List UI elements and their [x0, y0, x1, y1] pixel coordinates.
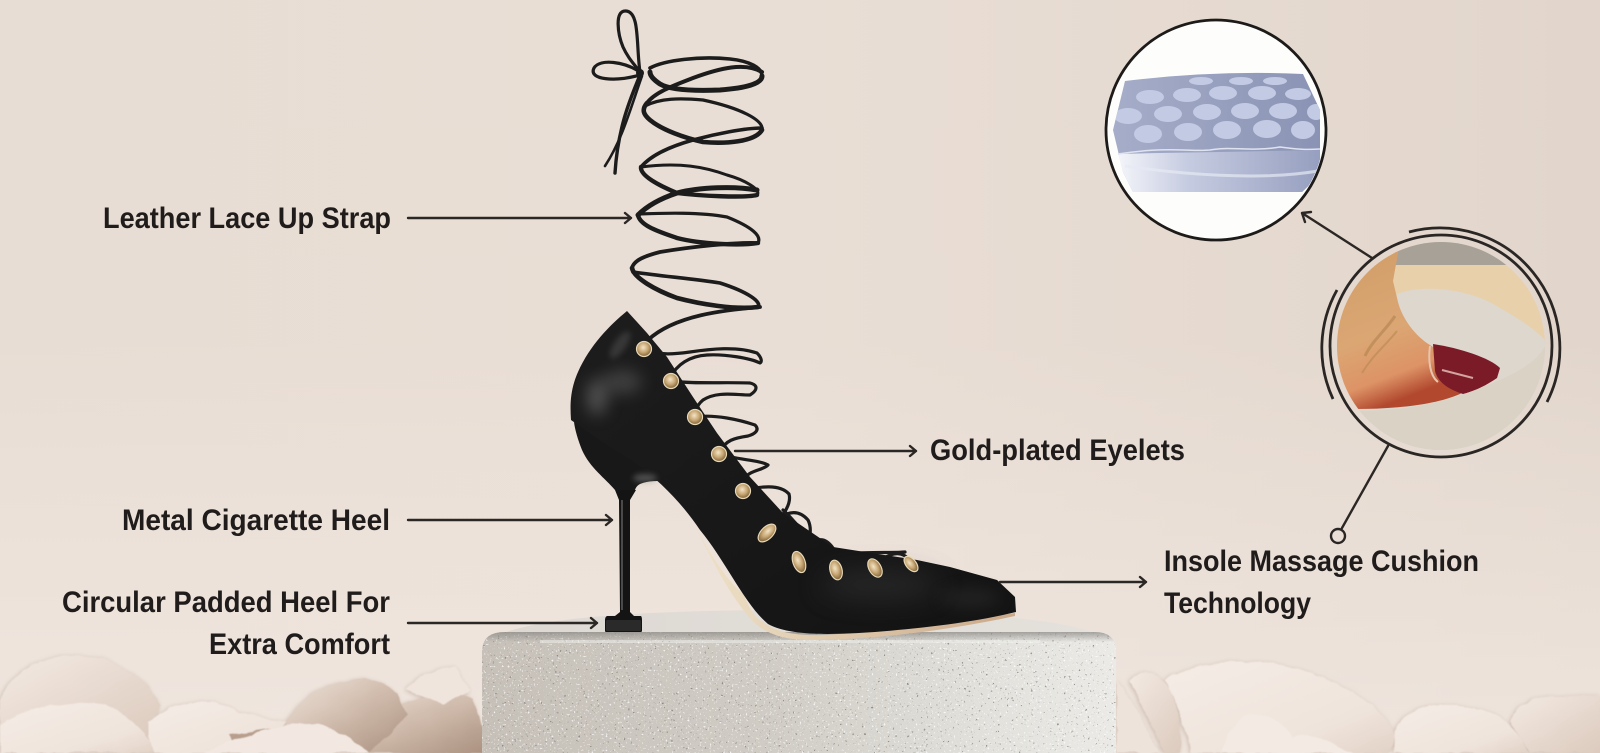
- outer ring and arcs: [1322, 228, 1560, 457]
- connector: toe circle to label marker: [1342, 446, 1388, 528]
- pedestal body: [482, 632, 1118, 753]
- label: Circular Padded Heel For Extra Comfort: Circular Padded Heel For: [62, 586, 390, 619]
- lower laces through eyelets: [644, 349, 910, 569]
- spiral wraps: [632, 58, 762, 340]
- arrow: heel: [408, 515, 612, 525]
- gold-plated eyelets: [636, 342, 921, 581]
- beige sole: [688, 513, 1015, 640]
- label: Metal Cigarette Heel: Metal Cigarette Heel: [122, 504, 390, 537]
- label: Insole Massage Cushion Technology: [1000, 545, 1479, 620]
- detail circle: toe in cushion: [1322, 228, 1560, 457]
- pedestal: [482, 610, 1118, 753]
- heel cup: [574, 422, 665, 490]
- label: Gold-plated Eyelets: [735, 434, 1185, 467]
- shoe upper: [571, 311, 1016, 634]
- leather highlights: [587, 328, 1000, 606]
- label: Gold-plated Eyelets: Gold-plated Eyelets: [930, 434, 1185, 467]
- arrow: eyelets: [735, 446, 916, 456]
- bow: [593, 11, 644, 173]
- arrow: strap: [408, 213, 631, 223]
- label: Circular Padded Heel For Extra Comfort: [62, 586, 597, 661]
- black leather pump: [571, 311, 1016, 640]
- pedestal top surface: [482, 610, 1116, 650]
- label: Insole Massage Cushion Technology: Technology: [1164, 587, 1311, 620]
- label: Leather Lace Up Strap: Leather Lace Up Strap: [103, 202, 391, 235]
- label: Insole Massage Cushion Technology: Insole Massage Cushion: [1164, 545, 1479, 578]
- detail circle: honeycomb insole: [1106, 20, 1326, 240]
- toe photo: [1337, 242, 1545, 450]
- rocks: right group: [1117, 661, 1600, 753]
- rocks: left group: [0, 655, 492, 753]
- marker ring: [1331, 529, 1345, 543]
- leather lace up strap: [593, 11, 910, 569]
- label: Circular Padded Heel For Extra Comfort: Extra Comfort: [209, 628, 390, 661]
- label: Metal Cigarette Heel: [122, 504, 612, 537]
- honeycomb cushion band: [1113, 73, 1325, 192]
- arrow: padded heel: [408, 618, 597, 628]
- arrow: toe: [1000, 577, 1146, 587]
- metal cigarette heel: [605, 490, 642, 632]
- connector arrow: to honeycomb circle: [1302, 212, 1372, 258]
- label: Leather Lace Up Strap: [103, 202, 631, 235]
